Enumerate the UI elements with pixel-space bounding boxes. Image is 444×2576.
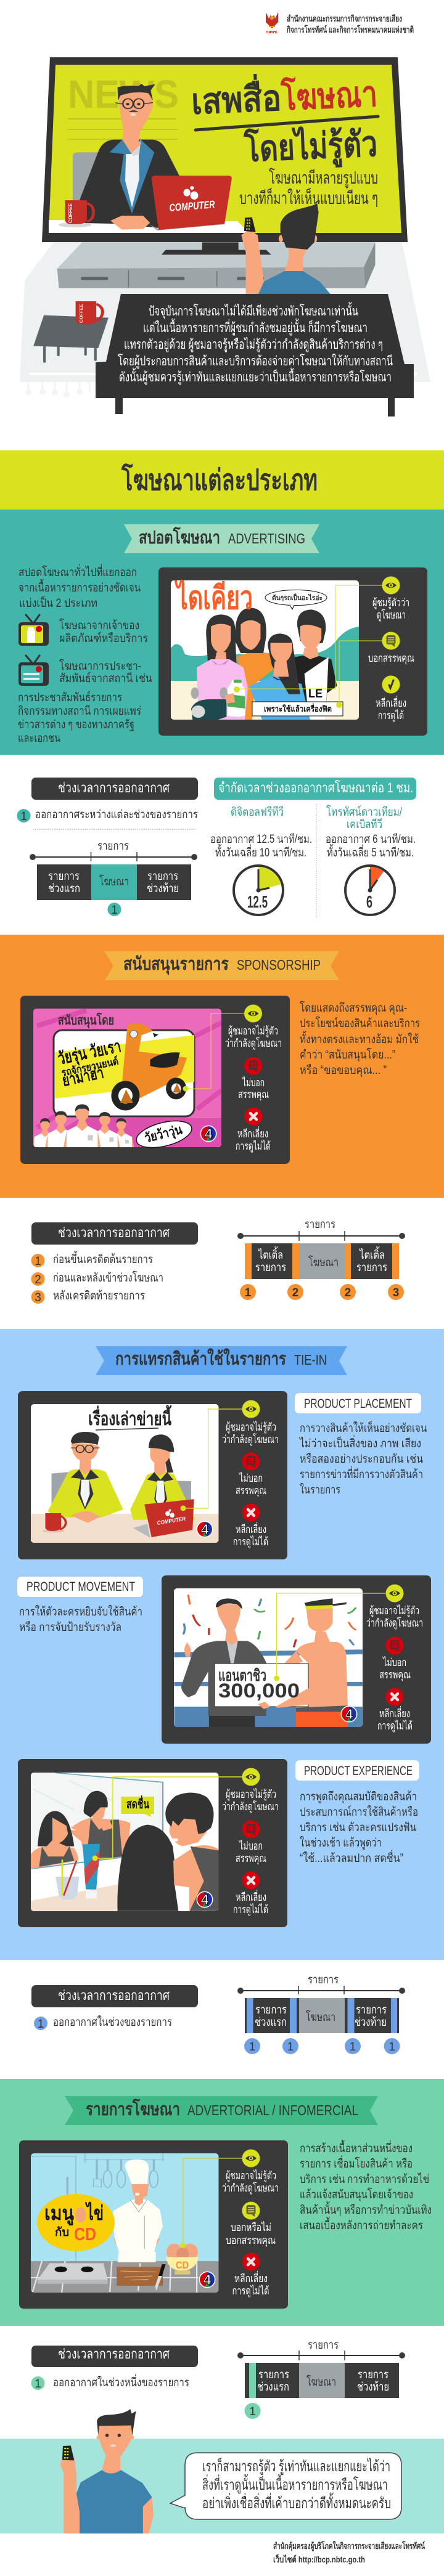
legend: no properties: ไม่บอก: [239, 1840, 263, 1852]
markers: 2: [292, 1286, 298, 1299]
label: product movement: PRODUCT MOVEMENT: [27, 1580, 135, 1594]
legend: no properties: [379, 1636, 411, 1681]
legend: may not know: ผู้ชมอาจไม่รู้ตัว: [369, 1604, 419, 1617]
channel logo: [199, 2271, 216, 2288]
satellite tv limit: โทรทัศน์ดาวเทียม/: [326, 805, 403, 819]
ribbon: advertising: ADVERTISING: [228, 530, 305, 546]
callout line: [180, 1409, 242, 1511]
description: โดยแสดงถึงสรรพคุณ คุณ-: [300, 1001, 407, 1015]
legend: unavoidable: [233, 1503, 268, 1548]
heading bar: [31, 778, 198, 800]
legend: viewer aware: ผู้ชมรู้ตัวว่า: [372, 596, 409, 609]
tv panel: [19, 2140, 288, 2309]
ribbon: tie-in: การแทรกสินค้าใช้ในรายการ: [115, 1348, 286, 1369]
text: product experience: “ใช้...แล้วลมปาก สดชื่น”: [300, 1850, 403, 1865]
timeline: [237, 1973, 405, 1994]
legend: may not know: [225, 1004, 282, 1050]
satellite tv limit: [326, 805, 416, 859]
program blocks: ช่วงท้าย: [147, 882, 179, 895]
clock: 6 minutes: 6: [366, 892, 372, 911]
legend: no properties: สรรพคุณ: [236, 1852, 266, 1865]
channel logo: [196, 1521, 213, 1538]
panel: sponsorship: [0, 935, 444, 1198]
description: ทั้งทางตรงและทางอ้อม มักใช้: [300, 1031, 419, 1046]
brand title: ไดเคียว: [174, 579, 253, 616]
legend: no properties: สรรพคุณ: [236, 1484, 266, 1497]
text: product placement: ไม่ว่าจะเป็นสิ่งของ ภาพ เสียง: [298, 1435, 421, 1450]
show title: [44, 2201, 104, 2245]
caption box: เพราะใช้แล้วเครื่องฟิต: [264, 703, 332, 713]
legend: may not know: ผู้ชมอาจไม่รู้ตัว: [226, 1421, 276, 1434]
description: [300, 2140, 432, 2232]
program blocks: รายการ: [48, 870, 80, 883]
text: station promo: สัมพันธ์จากสถานี เช่น: [59, 672, 152, 685]
marker: [245, 2403, 261, 2419]
legend: unavoidable: [232, 2253, 269, 2298]
text: product placement: ในรายการ: [300, 1483, 340, 1497]
intro paragraph: จากเนื้อหารายการอย่างชัดเจน: [18, 579, 141, 595]
channel logo: [200, 1125, 217, 1142]
news backdrop: NEWS: [68, 72, 179, 116]
heading bar: ช่วงเวลาการออกอากาศ: [58, 1225, 170, 1240]
ribbon: advertorial: ADVERTORIAL / INFOMERCIAL: [187, 2102, 358, 2118]
ribbon: sponsorship: [104, 951, 339, 980]
heading: โฆษณาแต่ละประเภท: [121, 463, 318, 496]
show title: ไข่: [85, 2201, 104, 2224]
intro board: [96, 294, 414, 416]
clock: 12.5 minutes: [234, 866, 283, 915]
legend: no properties: ไม่บอก: [239, 1472, 263, 1484]
label: product experience: [295, 1760, 419, 1781]
legend: unavoidable: การดูไม่ได้: [233, 1535, 268, 1548]
ribbon: advertorial: [65, 2096, 378, 2125]
item one: 1: [20, 810, 27, 823]
legend: unavoidable: หลีกเลี่ยง: [379, 1706, 410, 1720]
schedule: advertorial: [31, 2339, 405, 2419]
ribbon: sponsorship: สนับสนุนรายการ: [123, 954, 229, 975]
channel logo: 4: [345, 1706, 353, 1722]
text: product experience: การพูดถึงคุณสมบัติของสินค้า: [300, 1790, 417, 1804]
digital tv limit: ทั้งวันเฉลี่ย 10 นาที/ชม.: [215, 844, 306, 859]
text: product movement: หรือ การจับป้ายรับรางวัล: [19, 1621, 121, 1634]
tv panel: movement: [162, 1575, 431, 1744]
legend: unavoidable: หลีกเลี่ยง: [237, 1126, 268, 1140]
program blocks: รายการ: [255, 1261, 286, 1274]
paragraph: examples: กิจกรรมทางสถานี การเผยแพร่: [18, 704, 141, 718]
sponsored by label: สนับสนุนโดย: [58, 1012, 114, 1029]
channel logo: [196, 1891, 213, 1908]
list of slots: 3: [35, 1291, 41, 1304]
clock: 12.5 minutes: 12.5: [247, 892, 268, 911]
program blocks: โฆษณา: [308, 1255, 339, 1269]
legend: unavoidable: การดูไม่ได้: [236, 1140, 271, 1153]
text: station promo: [59, 659, 152, 685]
legend: viewer aware: ดูโฆษณา: [377, 609, 406, 622]
clock: 6 minutes: [345, 866, 395, 915]
icon: garuda emblem: กสทช.: [266, 30, 278, 35]
legend: no properties: ไม่บอก: [382, 1656, 406, 1668]
heading bar: ช่วงเวลาการออกอากาศ: [58, 780, 170, 795]
viewer character: [60, 2409, 154, 2533]
timeline: รายการ: [305, 1218, 335, 1231]
channel logo: [340, 1705, 358, 1723]
limit bar: [214, 778, 416, 800]
channel logo: 4: [201, 1891, 209, 1908]
heading bar: [31, 1985, 198, 2007]
legend: may not know: ผู้ชมอาจไม่รู้ตัว: [228, 1025, 278, 1038]
description: รายการ เชื่อมโยงสินค้า หรือ: [300, 2155, 413, 2171]
item one: ออกอากาศระหว่างแต่ละช่วงของรายการ: [35, 808, 198, 821]
list of slots: [31, 1251, 163, 1304]
heading bar: [31, 2346, 198, 2367]
legend: may not know: ว่ากำลังดูโฆษณา: [225, 1037, 282, 1050]
agency name: สำนักงานคณะกรรมการกิจการกระจายเสียง: [287, 14, 402, 23]
list of slots: ก่อนและหลังเข้าช่วงโฆษณา: [53, 1270, 163, 1285]
program blocks: [245, 1243, 399, 1279]
item one: 1: [38, 2018, 44, 2031]
text: product ads: โฆษณาจากเจ้าของ: [59, 618, 139, 632]
legend: no properties: [238, 1057, 269, 1101]
program logo: วัยว้าวุ่น: [143, 1122, 184, 1147]
program blocks: ช่วงแรก: [255, 2016, 287, 2029]
viewer with remote: [241, 203, 331, 294]
intro text: [118, 302, 393, 385]
footer credit: เว็บไซต์ http://bcp.nbtc.go.th: [273, 2554, 365, 2564]
tv cabinet: [57, 242, 375, 288]
text: product ads: [59, 618, 148, 645]
paragraph: examples: การประชาสัมพันธ์รายการ: [18, 691, 122, 704]
subtitle: [239, 168, 378, 208]
subtitle: โฆษณามีหลายรูปแบบ: [269, 168, 378, 189]
description: คำว่า “สนับสนุนโดย...”: [300, 1047, 395, 1062]
speech tag: สดชื่น: [126, 1795, 149, 1811]
title line one: โฆษณา: [280, 72, 378, 118]
legend: no properties: สรรพคุณ: [238, 1088, 269, 1101]
title line one: เสพสื่อ: [190, 73, 282, 122]
markers: 1: [245, 1286, 252, 1299]
list of slots: 1: [35, 1255, 41, 1268]
mug label: COFFEE: [68, 203, 73, 223]
legend: unavoidable: หลีกเลี่ยง: [236, 1522, 266, 1535]
speech bubble: ต้นๆรถเป็นอะไรอ่ะ: [272, 593, 323, 602]
legend: unavoidable: [377, 1688, 413, 1733]
program blocks: รายการ: [255, 2004, 287, 2017]
text: product experience: ในช่วงเช้า แล้วพูดว่า: [300, 1836, 382, 1850]
program blocks: ช่วงแรก: [48, 882, 80, 895]
prize cheque text: แอนตาชิว: [218, 1666, 266, 1684]
program blocks: ไตเติ้ล: [358, 1246, 385, 1262]
legend: unavoidable: การดูไม่ได้: [233, 1903, 268, 1916]
program blocks: รายการ: [358, 2368, 388, 2381]
program blocks: โฆษณา: [99, 874, 129, 888]
callout lines: [237, 585, 382, 705]
programme title: [88, 1405, 172, 1430]
icon: tv with product: [18, 615, 49, 646]
closing band with viewer: [0, 2409, 444, 2533]
satellite tv limit: เคเบิลทีวี: [347, 818, 382, 831]
markers: [244, 2038, 400, 2054]
heading bar: ช่วงเวลาการออกอากาศ: [58, 1988, 170, 2003]
description: [300, 1001, 420, 1078]
timeline: [237, 1218, 405, 1241]
markers: 1: [388, 2041, 395, 2054]
hero: living room with television: [20, 57, 430, 416]
schedule: sponsorship: [31, 1218, 405, 1304]
ribbon: tie-in: [96, 1346, 347, 1375]
panel: spot advertising: [0, 510, 444, 755]
sponsor slogan: วัยรุ่น วัยเรา: [56, 1036, 123, 1070]
legend: avoidable: หลีกเลี่ยง: [376, 696, 406, 709]
program blocks: ไตเติ้ล: [257, 1246, 283, 1262]
legend: unavoidable: การดูไม่ได้: [232, 2285, 269, 2298]
markers: 1: [350, 2041, 356, 2054]
program blocks: [245, 1998, 399, 2033]
bowl label: CD: [176, 2259, 189, 2271]
legend: may tell properties: บอกสรรพคุณ: [226, 2234, 276, 2247]
text: product experience: [300, 1790, 418, 1865]
markers: 2: [345, 1286, 351, 1299]
programme title: เรื่องเล่าข่ายนี้: [88, 1405, 172, 1429]
desk: [49, 220, 249, 233]
legend: may not know: [222, 2149, 279, 2195]
sponsor slogan: [56, 1036, 123, 1090]
tv panel: experience: [18, 1759, 287, 1927]
program blocks: [37, 864, 191, 900]
ribbon: sponsorship: SPONSORSHIP: [237, 957, 321, 973]
program blocks: โฆษณา: [306, 2375, 336, 2389]
legend: may tell properties: [226, 2202, 276, 2247]
program blocks: โฆษณา: [306, 2010, 335, 2024]
floor rug: [20, 242, 430, 397]
program blocks: รายการ: [147, 870, 178, 883]
title underline: [195, 116, 378, 130]
timeline: รายการ: [308, 2339, 339, 2352]
tv panel: [158, 567, 427, 736]
screen: sponsor card: [32, 1009, 221, 1148]
satellite tv limit: ทั้งวันเฉลี่ย 5 นาที/ชม.: [327, 844, 414, 859]
item one: ออกอากาศในช่วงหนึ่งของรายการ: [53, 2374, 189, 2389]
prize cheque text: [218, 1666, 300, 1702]
legend: no properties: [236, 1453, 266, 1497]
item one: ออกอากาศในช่วงของรายการ: [53, 2015, 172, 2029]
legend: unavoidable: หลีกเลี่ยง: [234, 2271, 268, 2285]
list of slots: หลังเครดิตท้ายรายการ: [53, 1290, 145, 1302]
legend: no properties: ไม่บอก: [242, 1076, 265, 1089]
speech tag: [121, 1795, 154, 1817]
channel logo: 4: [204, 2272, 212, 2288]
legend: unavoidable: หลีกเลี่ยง: [236, 1890, 266, 1903]
callout line: [274, 1593, 385, 1681]
description: แล้วแจ้งสนับสนุนโดยเจ้าของ: [300, 2187, 413, 2202]
legend: may tell properties: บอกหรือไม่: [231, 2221, 271, 2233]
presenter at desk: [59, 84, 232, 230]
timeline: รายการ: [97, 840, 129, 853]
program logo: [134, 1116, 194, 1153]
laptop label: COMPUTER: [157, 1516, 186, 1526]
heading bar: ช่วงเวลาการออกอากาศ: [58, 2346, 170, 2362]
callout line: [180, 2158, 242, 2248]
legend: may not know: [366, 1585, 423, 1630]
header: agency logo and name: [266, 12, 414, 35]
show title: เมนู: [44, 2202, 74, 2226]
program blocks: รายการ: [258, 2368, 289, 2381]
second mug label: COFFEE: [78, 304, 84, 323]
show title: CD: [74, 2225, 96, 2245]
title line two: โดยไม่รู้ตัว: [243, 122, 378, 171]
apron text: LE: [308, 688, 323, 701]
timeline: [30, 840, 197, 861]
legend: no properties: สรรพคุณ: [379, 1668, 411, 1681]
speech bubble: [265, 590, 327, 609]
ribbon: advertising: สปอตโฆษณา: [139, 526, 220, 548]
program blocks: [245, 2363, 399, 2398]
channel logo: 4: [201, 1521, 209, 1537]
ribbon: advertising: [124, 524, 319, 553]
text: product placement: หรือสองอย่างประกอบกัน เช่น: [300, 1453, 423, 1466]
legend: tells properties: [368, 632, 414, 665]
marker one: [107, 903, 121, 917]
show title: กับ: [55, 2226, 69, 2239]
news backdrop: [68, 72, 179, 139]
markers: [240, 1284, 404, 1300]
closing message: [202, 2457, 391, 2512]
schedule: spot advertising: [17, 778, 416, 918]
subtitle: บางทีก็มาให้เห็นแบบเนียน ๆ: [239, 187, 378, 208]
callout line: [183, 1014, 244, 1092]
caption box: [252, 702, 343, 716]
legend: unavoidable: การดูไม่ได้: [377, 1720, 413, 1733]
channel logo: 4: [205, 1126, 213, 1142]
text: product ads: ผลิตภัณฑ์หรือบริการ: [59, 632, 148, 645]
markers: 1: [287, 2041, 294, 2054]
tv panel: placement: [18, 1391, 287, 1559]
legend: may not know: ผู้ชมอาจไม่รู้ตัว: [226, 1788, 276, 1801]
sponsor slogan: ยามาฮ่า: [60, 1063, 105, 1090]
timeline: รายการ: [308, 1973, 339, 1986]
item one: [34, 2015, 172, 2031]
screen: bathroom: [31, 1773, 219, 1911]
list of slots: 2: [35, 1274, 41, 1286]
timeline: [237, 2339, 405, 2360]
schedule: tie-in: [31, 1973, 405, 2054]
markers: 1: [249, 2041, 255, 2054]
screen: boxing prize: [174, 1588, 363, 1731]
speech bubble: [170, 2453, 401, 2519]
text: product placement: [298, 1420, 427, 1497]
coffee table with mug: [33, 301, 109, 362]
heading bar: [31, 1222, 198, 1245]
intro paragraph: แบ่งเป็น 2 ประเภท: [19, 595, 97, 610]
legend: avoidable: การดูได้: [378, 709, 404, 722]
title line one: [190, 68, 378, 122]
list of slots: ก่อนขึ้นเครดิตต้นรายการ: [53, 1251, 153, 1266]
paragraph: examples: [18, 691, 141, 745]
legend: no properties: [236, 1820, 266, 1865]
digital tv limit: ดิจิตอลฟรีทีวี: [231, 805, 284, 819]
marker one: 1: [111, 904, 118, 917]
program blocks: ช่วงท้าย: [355, 2016, 387, 2029]
icon: garuda emblem: [266, 12, 278, 35]
intro paragraph: สปอตโฆษณาทั่วไปที่แยกออก: [18, 564, 137, 579]
intro paragraph: [18, 564, 141, 610]
legend: unavoidable: [236, 1108, 271, 1153]
intro text: ปัจจุบันการโฆษณาไม่ได้มีเพียงช่วงพักโฆษณาเท่านั้น: [149, 302, 358, 319]
label: product movement: [17, 1577, 143, 1597]
section heading band: [0, 450, 444, 510]
screen: cooking show: [31, 2153, 219, 2293]
item one: 1: [35, 2378, 41, 2391]
label: product placement: [295, 1393, 421, 1413]
agency name: [287, 14, 414, 35]
text: product movement: การให้ตัวละครหยิบจับใช้สินค้า: [19, 1605, 142, 1619]
legend: viewer aware: [372, 577, 409, 622]
callout line: [92, 1777, 242, 1861]
satellite tv limit: ออกอากาศ 6 นาที/ชม.: [326, 832, 416, 846]
legend: unavoidable: [233, 1872, 268, 1916]
program blocks: ช่วงแรก: [257, 2381, 289, 2394]
screen: news desk: [31, 1404, 219, 1543]
prize cheque text: 300,000: [218, 1680, 300, 1702]
program blocks: รายการ: [356, 1261, 387, 1274]
tv panel: [20, 996, 290, 1164]
television screen: [49, 65, 401, 233]
text: station promo: โฆษณาการประชา-: [59, 659, 141, 673]
legend: avoidable: [376, 675, 406, 722]
screen: ad scene: [171, 580, 359, 720]
text: product experience: บริการ เช่น ตัวละครแปรงฟัน: [300, 1821, 416, 1834]
markers: 3: [393, 1286, 399, 1299]
paragraph: examples: และเอกชน: [18, 732, 60, 745]
callout dots: [234, 686, 342, 708]
legend: may not know: ผู้ชมอาจไม่รู้ตัว: [226, 2169, 276, 2182]
legend: may not know: [222, 1768, 279, 1813]
item one: [17, 808, 198, 823]
icon: tv with station promo: [18, 656, 49, 686]
television frame: [42, 57, 408, 242]
digital tv limit: [210, 805, 312, 859]
footer credit: [273, 2540, 425, 2564]
description: การสร้างเนื้อหาส่วนหนึ่งของ: [300, 2140, 413, 2155]
ribbon: tie-in: TIE-IN: [294, 1352, 327, 1368]
legend: tells properties: บอกสรรพคุณ: [368, 652, 414, 665]
legend: may not know: ว่ากำลังดูโฆษณา: [222, 1800, 279, 1813]
description: หรือ “ขอขอบคุณ... ”: [300, 1064, 387, 1078]
program blocks: รายการ: [356, 2004, 387, 2017]
panel: advertorial: [0, 2079, 444, 2326]
digital tv limit: ออกอากาศ 12.5 นาที/ชม.: [210, 832, 312, 846]
ribbon: advertorial: รายการโฆษณา: [86, 2098, 180, 2119]
program blocks: ช่วงท้าย: [357, 2381, 389, 2394]
laptop label: COMPUTER: [169, 198, 216, 214]
marker: 1: [249, 2405, 256, 2418]
sponsor slogan: รถจักรยานยนต์: [60, 1055, 120, 1079]
text: product movement: [19, 1605, 142, 1634]
legend: may not know: ว่ากำลังดูโฆษณา: [222, 1433, 279, 1446]
item one: [31, 2374, 189, 2391]
paragraph: examples: ข่าวสารต่าง ๆ ของทางภาครัฐ: [18, 718, 134, 731]
legend: may not know: ว่ากำลังดูโฆษณา: [222, 2182, 279, 2195]
legend: may not know: [222, 1400, 279, 1446]
panel: tie-in: [0, 1329, 444, 1960]
